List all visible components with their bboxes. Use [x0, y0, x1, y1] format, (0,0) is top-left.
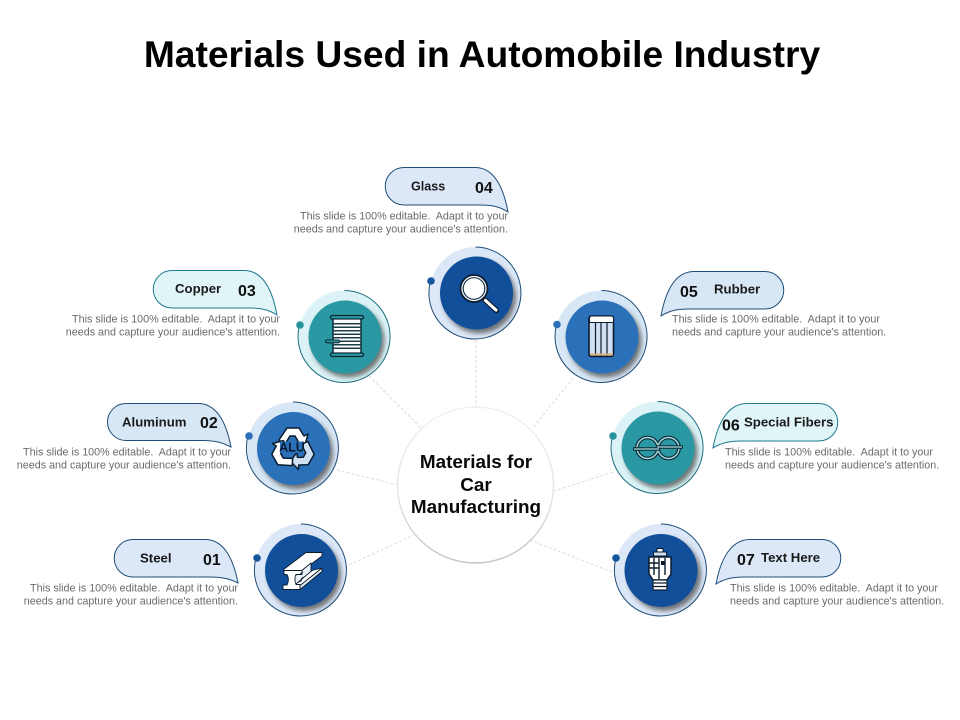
ring: glass — [427, 247, 522, 339]
title: Materials Used in Automobile Industry — [144, 33, 820, 75]
callout: special fibers: Special Fibers — [744, 414, 833, 430]
description: glass: needs and capture your audience's attention. — [294, 224, 508, 236]
ring: aluminum — [245, 402, 339, 494]
callout: copper: Copper — [175, 281, 221, 296]
icon: recycling ALU — [267, 428, 318, 472]
description: text here: This slide is 100% editable. Adapt it to your — [730, 582, 938, 594]
callout: aluminum — [108, 404, 231, 447]
callout: aluminum: 02 — [200, 415, 218, 432]
item 07: text here — [612, 524, 944, 616]
callout: copper: 03 — [238, 283, 256, 300]
description: rubber: This slide is 100% editable. Adapt it to your — [672, 314, 880, 326]
icon: steel I-beam — [283, 552, 322, 590]
icon: rubber roll — [589, 316, 614, 356]
central label: Manufacturing — [411, 497, 541, 518]
description: steel: needs and capture your audience's attention. — [24, 596, 238, 608]
description: rubber: needs and capture your audience's attention. — [672, 326, 886, 338]
central circle — [398, 407, 554, 563]
ring: text here — [612, 524, 707, 616]
callout: glass: Glass — [411, 180, 445, 194]
description: special fibers: This slide is 100% editable. Adapt it to your — [725, 446, 933, 458]
callout: steel: 01 — [203, 552, 221, 569]
ring: copper — [296, 290, 390, 382]
callout: steel — [114, 540, 238, 583]
icon: knot — [633, 438, 683, 458]
ALU text: ALU — [279, 440, 305, 454]
callout: glass: 04 — [475, 180, 493, 197]
connector lines — [337, 340, 613, 572]
callout: copper — [153, 270, 277, 315]
description: steel: This slide is 100% editable. Adapt it to your — [30, 582, 238, 594]
icon: magnifying glass — [460, 275, 496, 310]
callout: special fibers: 06 — [722, 418, 740, 434]
description: glass: This slide is 100% editable. Adapt it to your — [300, 210, 508, 222]
callout: rubber: 05 — [680, 284, 698, 301]
callout: rubber — [661, 272, 784, 316]
item 03: copper — [66, 270, 390, 382]
item 05: rubber — [553, 272, 886, 382]
item 04: glass — [294, 168, 522, 339]
description: special fibers: needs and capture your audience's attention. — [725, 460, 939, 472]
icon: spark plug — [649, 548, 671, 590]
callout: text here — [716, 540, 841, 584]
ring: rubber — [553, 290, 648, 382]
central label: Car — [460, 475, 492, 496]
ring: special fibers — [609, 402, 704, 494]
callout: glass — [385, 168, 508, 212]
callout: steel: Steel — [140, 550, 172, 566]
callout: aluminum: Aluminum — [122, 414, 186, 430]
callout: special fibers — [713, 404, 838, 448]
callout: rubber: Rubber — [714, 282, 760, 296]
central label: Materials for — [420, 452, 533, 473]
ring: steel — [253, 524, 347, 616]
item 06: special fibers — [609, 402, 939, 494]
description: copper: This slide is 100% editable. Adapt it to your — [72, 314, 280, 326]
callout: text here: Text Here — [761, 550, 820, 565]
icon: copper spool — [326, 316, 364, 356]
item 01: steel — [24, 524, 347, 616]
callout: text here: 07 — [737, 552, 755, 569]
description: aluminum: needs and capture your audience's attention. — [17, 460, 231, 472]
description: copper: needs and capture your audience's attention. — [66, 326, 280, 338]
description: aluminum: This slide is 100% editable. Adapt it to your — [23, 446, 231, 458]
description: text here: needs and capture your audience's attention. — [730, 596, 944, 608]
item 02: aluminum — [17, 402, 339, 494]
